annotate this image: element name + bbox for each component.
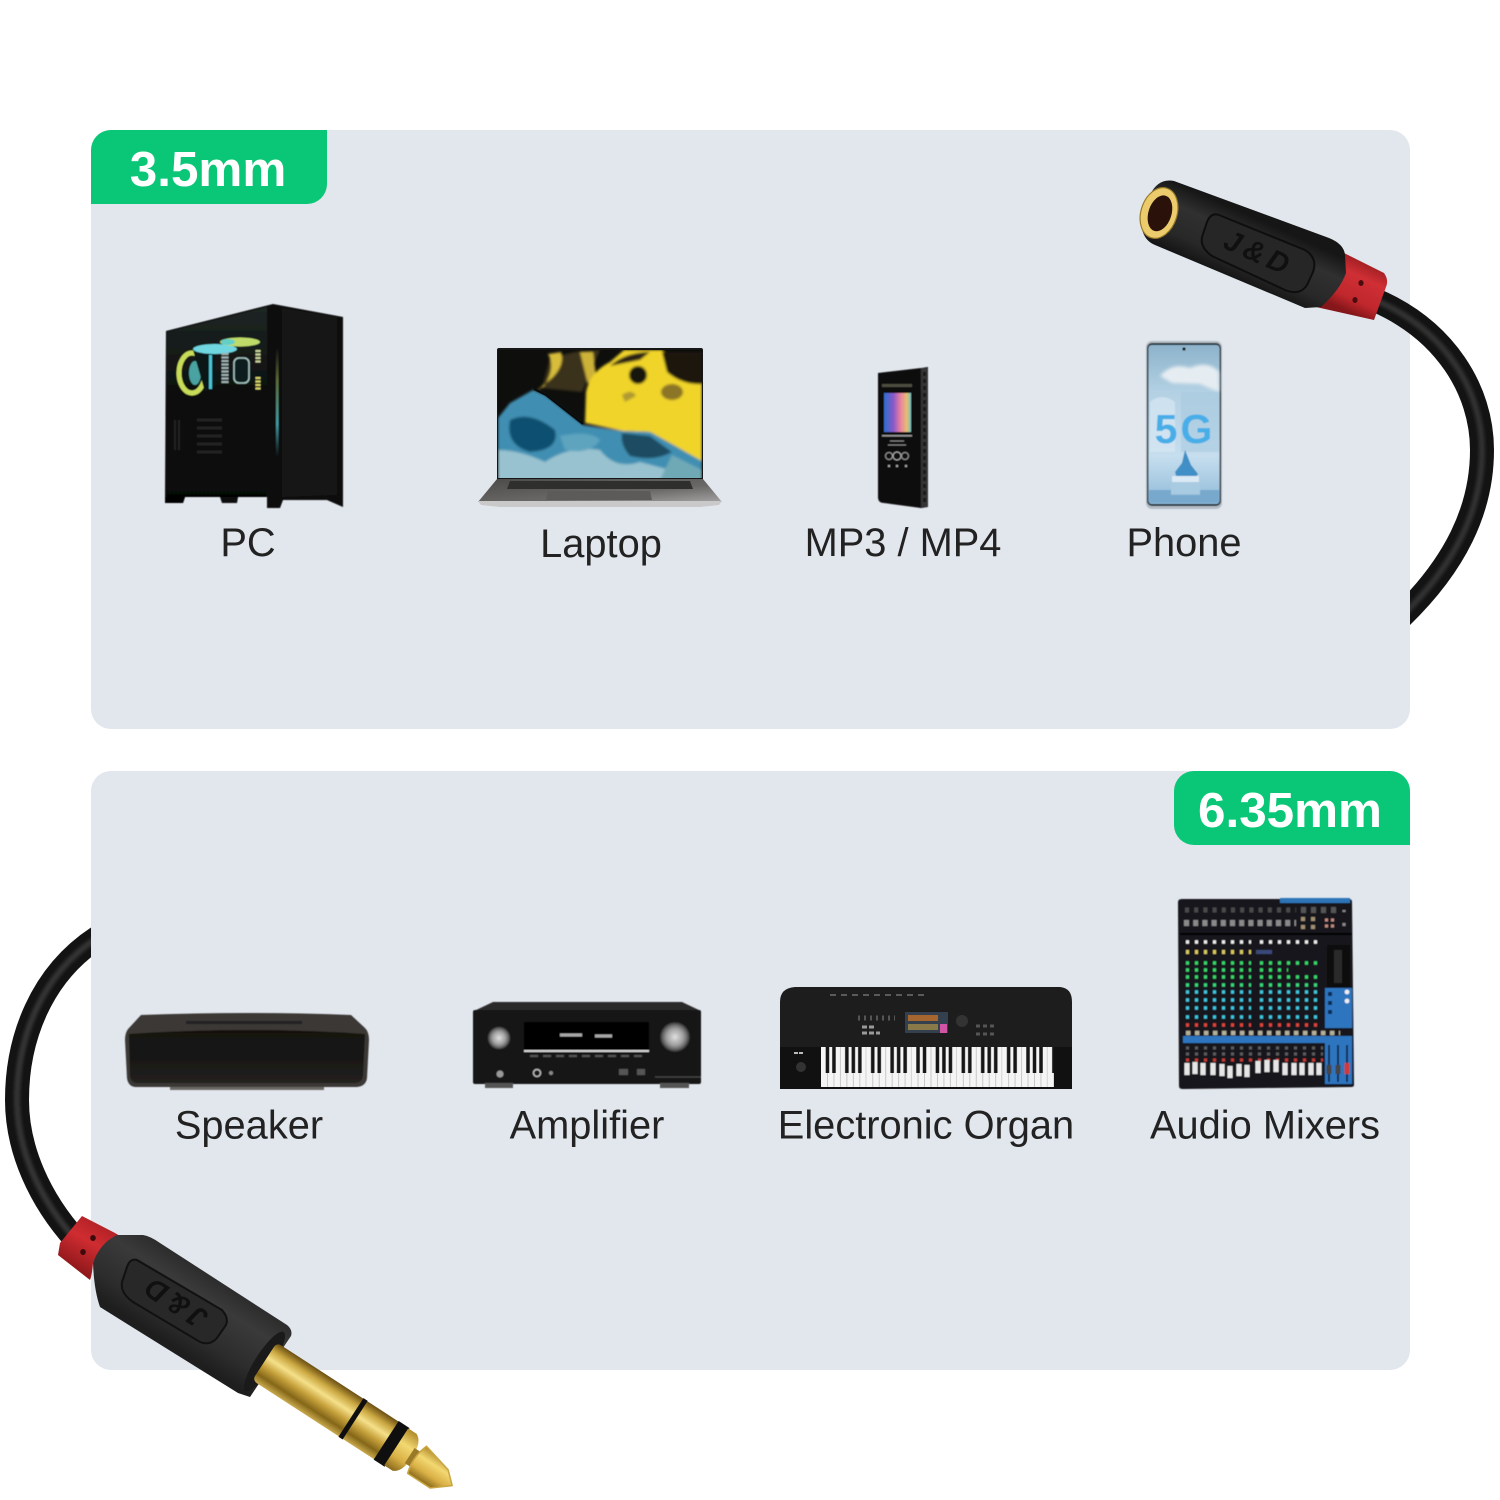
panel: 6.35mm devices (91, 771, 1410, 1370)
label: MP3 / MP4: MP3 / MP4 (805, 521, 1001, 565)
logo: J&D: J&D (135, 1268, 214, 1334)
device: laptop (478, 348, 722, 507)
device: audio mixer (1178, 898, 1354, 1089)
front jacks (496, 1069, 701, 1078)
vents (197, 420, 222, 452)
device: PC tower (165, 304, 343, 508)
housing: black barrel (93, 1235, 292, 1397)
display window (524, 1022, 649, 1056)
gold shaft and tip (238, 1327, 472, 1500)
socket: gold mouth (1134, 183, 1184, 243)
blue sections (1183, 988, 1352, 1084)
device: phone (1146, 341, 1222, 509)
label: Amplifier: Amplifier (510, 1104, 664, 1148)
label: Speaker: Speaker (175, 1104, 323, 1148)
strain relief: red collar (1316, 250, 1387, 320)
badge: 3.5mm (91, 130, 327, 204)
faders (1186, 1048, 1323, 1078)
player screen art (884, 393, 911, 432)
fans (179, 338, 260, 393)
logo: J&D: J&D (1219, 224, 1298, 283)
label: Phone: Phone (1126, 521, 1242, 565)
device: speaker (125, 1013, 369, 1090)
knob rows (1186, 942, 1340, 1033)
housing: black barrel (1141, 181, 1346, 308)
device: MP3 player (878, 367, 928, 508)
label: Laptop: Laptop (540, 522, 662, 566)
keyboard deck (478, 479, 722, 502)
touch screen (905, 1012, 948, 1033)
knob and buttons (794, 995, 994, 1072)
phone wallpaper text: 5G (1155, 406, 1215, 452)
badge: 6.35mm (1174, 771, 1410, 845)
logo: J&D (122, 1260, 227, 1343)
master meter (1327, 945, 1350, 987)
connector: 3.5mm female socket (1134, 181, 1387, 320)
device: electronic organ (780, 987, 1072, 1089)
laptop wallpaper (498, 350, 702, 482)
label: Audio Mixers: Audio Mixers (1150, 1104, 1380, 1148)
badge: 3.5mm: 3.5mm (130, 142, 286, 197)
label: PC: PC (220, 521, 276, 565)
device: amplifier (473, 1002, 701, 1088)
strain relief: red collar (58, 1216, 120, 1280)
cable: upper, leading to 3.5mm socket (1375, 300, 1482, 618)
badge: 6.35mm: 6.35mm (1198, 783, 1382, 838)
label: Electronic Organ: Electronic Organ (778, 1104, 1074, 1148)
logo: J&D (1202, 214, 1314, 292)
cable: lower, leading to 6.35mm plug (17, 936, 100, 1240)
panel: 3.5mm devices (91, 130, 1410, 729)
input jacks (1185, 908, 1296, 912)
connector: 6.35mm stereo plug (58, 1216, 472, 1500)
knobs (488, 1026, 510, 1050)
keybed (821, 1047, 1054, 1087)
